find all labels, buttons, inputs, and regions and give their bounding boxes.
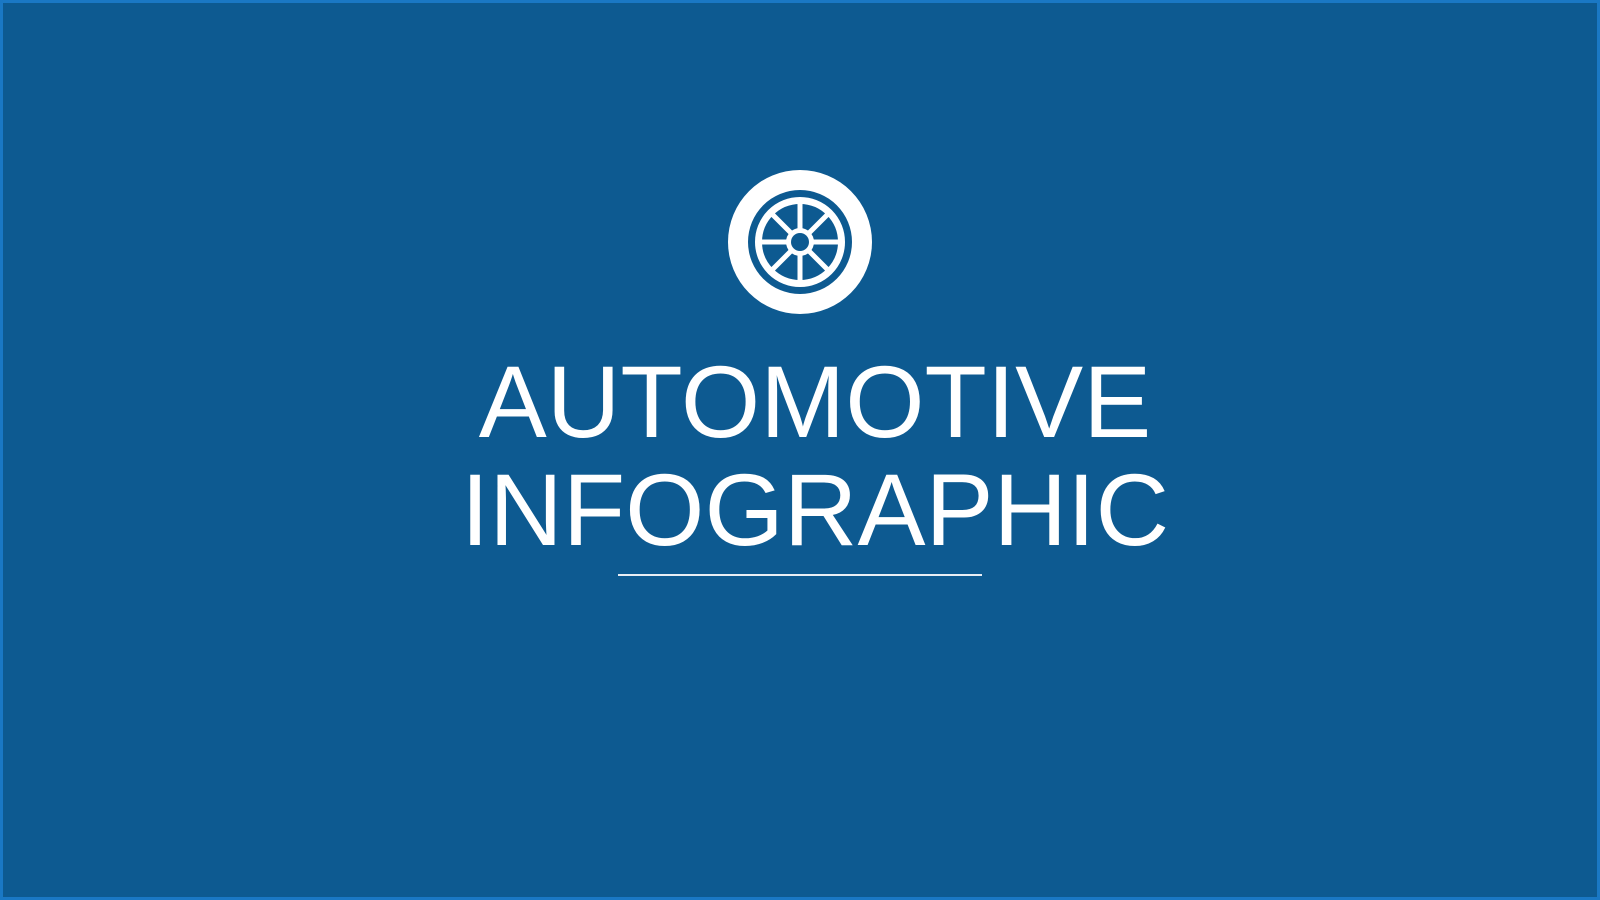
title: INFOGRAPHIC bbox=[461, 453, 1169, 567]
title: AUTOMOTIVE bbox=[479, 345, 1151, 459]
icon: wheel bbox=[728, 170, 872, 314]
title bbox=[461, 345, 1169, 567]
